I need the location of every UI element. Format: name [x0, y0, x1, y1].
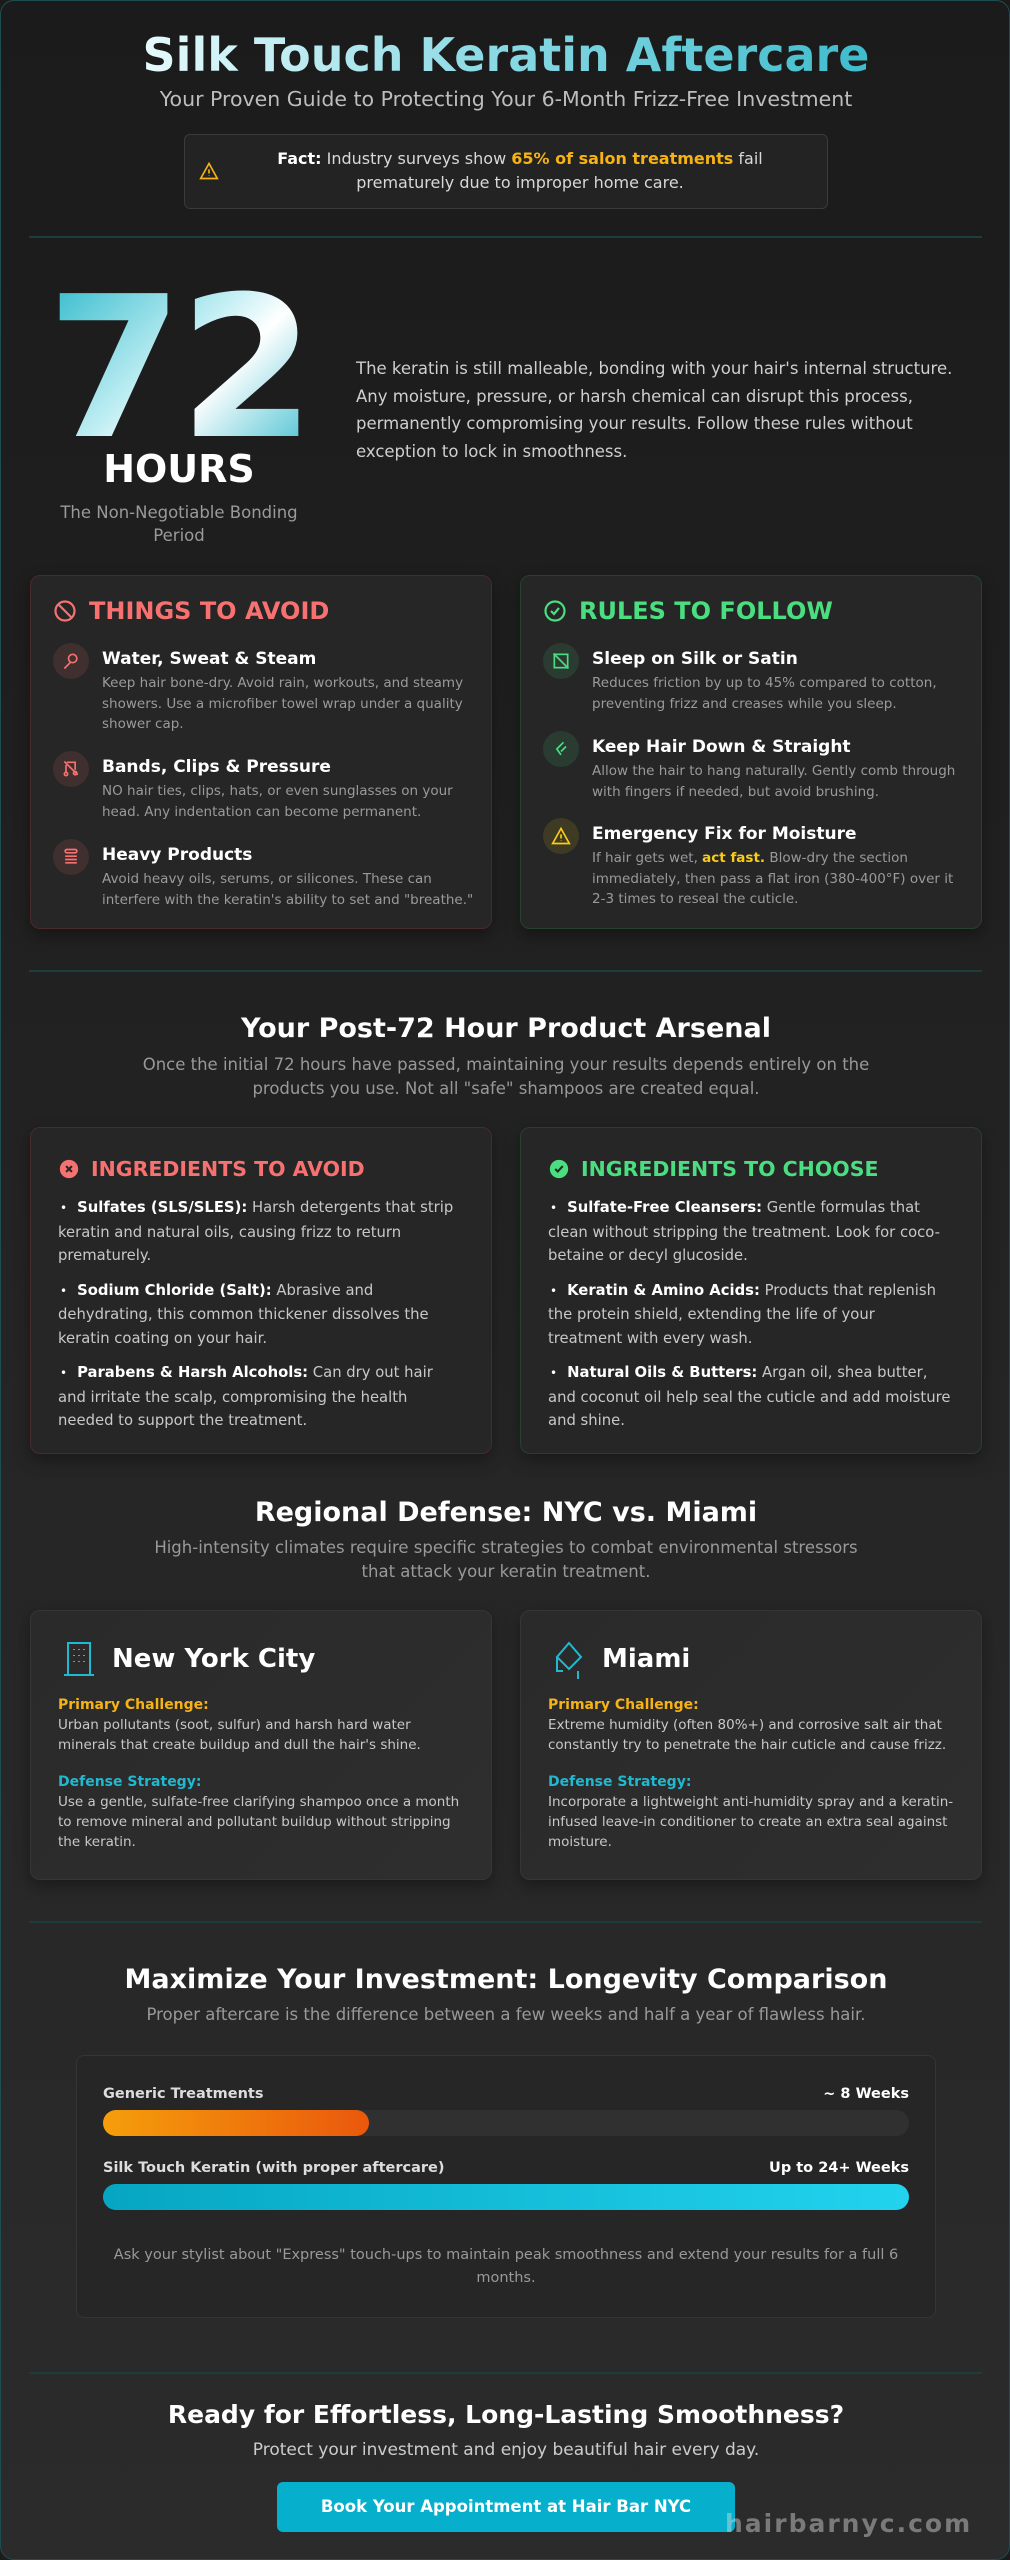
heading: ingredients to choose: INGREDIENTS TO CHOOSE	[581, 1157, 878, 1181]
panel: ingredients to avoid	[30, 1127, 492, 1454]
item: water: Water, Sweat & Steam	[102, 649, 316, 669]
button: book	[277, 2482, 735, 2532]
text: miami challenge	[548, 1697, 946, 1753]
item: bands: Bands, Clips & Pressure	[102, 757, 331, 777]
panel: new york city	[30, 1610, 492, 1880]
panel: miami	[520, 1610, 982, 1880]
icon: products	[53, 839, 89, 875]
text: arsenal intro: Once the initial 72 hours have passed, maintaining your results depends entirely on the products you use. Not all "safe" shampoos are created equal.	[143, 1055, 869, 1098]
stat: 72 hours: HOURS	[103, 447, 255, 491]
callout: fact box: Fact: Industry surveys show 65% of salon treatments fail prematurely due to improper home care.	[277, 149, 763, 192]
heading: things to avoid: THINGS TO AVOID	[89, 597, 329, 625]
bar: generic	[103, 2110, 909, 2136]
text: nyc challenge: Primary Challenge:	[58, 1697, 209, 1713]
watermark: hairbarnyc.com	[725, 2509, 972, 2538]
text: nyc strategy: Use a gentle, sulfate-free clarifying shampoo once a month to remove mineral and pollutant buildup without stripping the keratin.	[58, 1794, 459, 1850]
title: Silk Touch Keratin Aftercare	[143, 28, 869, 82]
icon: hair down	[543, 731, 579, 767]
panel: things to avoid: NO hair ties, clips, hats, or even sunglasses on your head. Any indentation can become permanent.	[102, 783, 453, 820]
bar label: generic: ~ 8 Weeks	[823, 2086, 909, 2102]
panel: things to avoid: Avoid heavy oils, serums, or silicones. These can interfere with the keratin's ability to set and "breathe."	[102, 871, 473, 908]
text: cta sub: Protect your investment and enjoy beautiful hair every day.	[253, 2440, 759, 2460]
list: choose items: Keratin & Amino Acids: Products that replenish the protein shield, extending the life of your treatment with every wash.	[548, 1282, 936, 1346]
bar label: generic	[103, 2086, 909, 2102]
heading: rules to follow: RULES TO FOLLOW	[579, 597, 833, 625]
list: avoid items: Sodium Chloride (Salt): Abrasive and dehydrating, this common thickener dissolves the keratin coating on your hair.	[58, 1282, 429, 1346]
icon: silk	[543, 643, 579, 679]
heading: nyc: New York City	[112, 1644, 315, 1674]
text: nyc challenge: Urban pollutants (soot, sulfur) and harsh hard water minerals that create buildup and dull the hair's shine.	[58, 1717, 421, 1753]
subtitle: Your Proven Guide to Protecting Your 6-Month Frizz-Free Investment	[160, 87, 852, 111]
stat: 72 hours: The Non-Negotiable Bonding Period	[60, 503, 298, 545]
text: miami challenge: Extreme humidity (often 80%+) and corrosive salt air that constantly try to penetrate the hair cuticle and cause frizz.	[548, 1717, 946, 1753]
heading: cta: Ready for Effortless, Long-Lasting Smoothness?	[168, 2400, 844, 2429]
panel: rules to follow: Allow the hair to hang naturally. Gently comb through with fingers if needed, but avoid brushing.	[592, 763, 955, 800]
heading: regional defense: Regional Defense: NYC vs. Miami	[255, 1497, 757, 1528]
item: silk: Sleep on Silk or Satin	[592, 649, 798, 669]
heading: ingredients to avoid: INGREDIENTS TO AVOID	[91, 1157, 365, 1181]
list: avoid items: Sulfates (SLS/SLES): Harsh detergents that strip keratin and natural oils, causing frizz to return prematurely.	[58, 1199, 453, 1264]
text: miami strategy: Incorporate a lightweight anti-humidity spray and a keratin-infused leave-in conditioner to create an extra seal against moisture.	[548, 1794, 953, 1850]
text: nyc strategy: Defense Strategy:	[58, 1774, 201, 1790]
item: products: Heavy Products	[102, 845, 252, 865]
note: Ask your stylist about "Express" touch-ups to maintain peak smoothness and extend your results for a full 6 months.	[114, 2247, 898, 2286]
text: longevity intro: Proper aftercare is the difference between a few weeks and half a year of flawless hair.	[146, 2005, 866, 2024]
icon: emergency	[543, 818, 579, 854]
text: regional intro: High-intensity climates require specific strategies to combat environmental stressors that attack your keratin treatment.	[154, 1538, 858, 1581]
panel: rules to follow: If hair gets wet, act fast. Blow-dry the section immediately, then pass a flat iron (380-400°F) over it 2-3 times to reseal the cuticle.	[592, 850, 953, 907]
bar label: generic: Generic Treatments	[103, 2086, 263, 2102]
bar label: silk touch	[103, 2160, 909, 2176]
panel: rules to follow	[520, 575, 982, 929]
icon: bands	[53, 751, 89, 787]
icon: building	[64, 1642, 94, 1676]
chart: longevity bars	[76, 2055, 936, 2318]
item: hair down: Keep Hair Down & Straight	[592, 737, 851, 757]
panel: things to avoid: Keep hair bone-dry. Avoid rain, workouts, and steamy showers. Use a microfiber towel wrap under a quality shower cap.	[102, 675, 463, 732]
callout: fact box	[184, 134, 828, 209]
list: avoid items	[58, 1199, 453, 1429]
panel: things to avoid	[30, 575, 492, 929]
list: choose items	[548, 1199, 950, 1429]
bar label: silk touch: Up to 24+ Weeks	[769, 2160, 909, 2176]
panel: rules to follow: Reduces friction by up to 45% compared to cotton, preventing frizz and creases while you sleep.	[592, 675, 937, 712]
panel: ingredients to choose	[520, 1127, 982, 1454]
heading: longevity: Maximize Your Investment: Longevity Comparison	[125, 1964, 887, 1995]
bar: silk touch	[103, 2184, 909, 2210]
bar label: silk touch: Silk Touch Keratin (with proper aftercare)	[103, 2160, 445, 2176]
button: book: Book Your Appointment at Hair Bar NYC	[321, 2497, 691, 2516]
text: miami challenge: Primary Challenge:	[548, 1697, 699, 1713]
icon: water	[53, 643, 89, 679]
list: avoid items: Parabens & Harsh Alcohols: Can dry out hair and irritate the scalp, compromising the health needed to support the treatment.	[58, 1364, 433, 1429]
text: miami strategy: Defense Strategy:	[548, 1774, 691, 1790]
item: emergency: Emergency Fix for Moisture	[592, 824, 857, 844]
heading: miami: Miami	[602, 1644, 690, 1674]
list: choose items: Natural Oils & Butters: Argan oil, shea butter, and coconut oil help seal the cuticle and add moisture and shine.	[548, 1364, 950, 1429]
text block: bonding explanation: The keratin is still malleable, bonding with your hair's internal structure. Any moisture, pressure, or harsh chemical can disrupt this process, permanently compromising your results. Follow these rules without exception to lock in smoothness.	[356, 359, 952, 461]
icon: humidity	[556, 1642, 582, 1679]
heading: product arsenal: Your Post-72 Hour Product Arsenal	[241, 1013, 771, 1044]
list: choose items: Sulfate-Free Cleansers: Gentle formulas that clean without stripping the treatment. Look for coco-betaine or decyl glucoside.	[548, 1199, 940, 1264]
text: nyc challenge	[58, 1697, 421, 1753]
stat: 72 hours: 72	[47, 255, 311, 483]
icon: warning	[199, 162, 219, 180]
